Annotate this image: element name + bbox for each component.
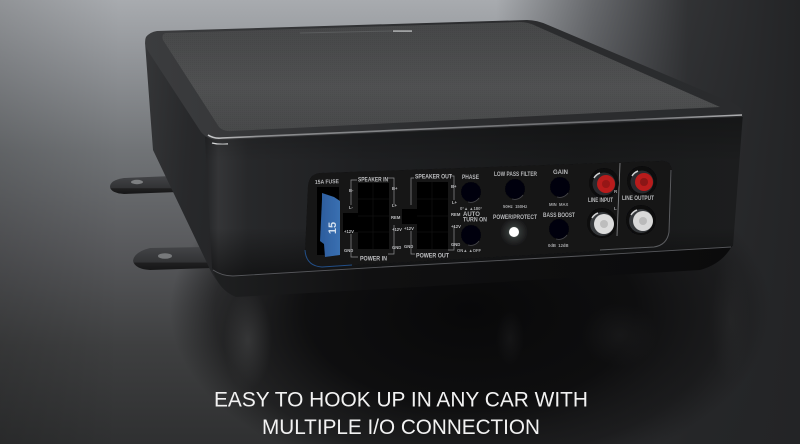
- phase knob: 0°▲ ▲180°: [460, 206, 482, 211]
- RCA panel: [585, 162, 671, 250]
- low pass filter knob: LOW PASS FILTER: [494, 172, 538, 178]
- RCA jack: line input R: [589, 168, 619, 198]
- panel recess: [305, 161, 672, 267]
- connector labels: +12V: [404, 226, 414, 231]
- gain knob: [549, 170, 570, 207]
- RCA jack: line output R: [627, 166, 657, 196]
- left side wall: [145, 42, 240, 297]
- fabric top panel: [162, 22, 720, 131]
- amplifier body: [145, 20, 743, 297]
- connector labels: GND: [451, 242, 460, 247]
- connector labels: GND: [344, 248, 353, 253]
- bass boost knob: BASS BOOST: [543, 213, 575, 219]
- connector labels: POWER OUT: [416, 252, 449, 260]
- caption: EASY TO HOOK UP IN ANY CAR WITH: [214, 388, 588, 412]
- bottom seam: [213, 247, 731, 276]
- bass boost knob: 0dB 12dB: [548, 243, 568, 248]
- RCA panel: R: [614, 189, 618, 194]
- connector labels: REM: [451, 212, 461, 217]
- connector labels: GND: [392, 245, 401, 250]
- low pass filter knob: 50Hz 150Hz: [503, 204, 527, 209]
- control panel: [305, 161, 672, 267]
- RCA panel: L: [614, 206, 617, 211]
- gain knob: GAIN: [553, 170, 568, 176]
- connector labels: B+: [392, 186, 398, 191]
- RCA labels: LINE INPUT: [588, 198, 613, 204]
- connector labels: REM: [391, 215, 401, 220]
- connector labels: L-: [349, 205, 354, 210]
- connector labels: B+: [451, 184, 457, 189]
- connector labels: SPEAKER IN: [358, 176, 388, 184]
- auto turn on knob: ON▲ ▲OFF: [457, 248, 482, 253]
- connector labels: +12V: [344, 229, 354, 234]
- connector labels: +12V: [451, 224, 461, 229]
- power protect LED: [493, 215, 537, 247]
- fuse 15A: [320, 193, 340, 257]
- front face: [205, 113, 743, 277]
- auto turn on knob: TURN ON: [463, 218, 487, 224]
- top rim highlight: [208, 115, 742, 138]
- speaker out connector: [402, 182, 448, 249]
- bass boost knob: [543, 213, 575, 248]
- power protect LED: POWER/PROTECT: [493, 215, 537, 221]
- gain knob: MIN MAX: [549, 202, 569, 207]
- connector brackets: [351, 176, 454, 257]
- low pass filter knob: [494, 172, 538, 209]
- floor reflection: [170, 135, 770, 444]
- bottom strip: [212, 246, 732, 297]
- logo glint on top: [300, 31, 412, 33]
- auto turn on knob: [457, 212, 487, 253]
- fuse 15A: 15: [327, 222, 339, 234]
- mounting tab: upper: [110, 176, 178, 194]
- phase knob: [460, 175, 482, 211]
- fuse label: 15A FUSE: [315, 179, 339, 186]
- connector labels: [344, 174, 461, 262]
- mounting tab: lower: [133, 247, 212, 270]
- RCA jack: line output L: [626, 205, 656, 235]
- caption: [214, 388, 588, 439]
- RCA panel: LINE OUTPUT: [622, 196, 654, 202]
- RCA jack: line input L: [587, 208, 617, 238]
- caption: MULTIPLE I/O CONNECTION: [262, 416, 540, 439]
- connector labels: SPEAKER OUT: [415, 174, 452, 180]
- speaker in connector: [343, 183, 389, 249]
- side rim corner highlight: [212, 143, 228, 144]
- connector labels: POWER IN: [360, 256, 387, 262]
- auto turn on knob: AUTO: [463, 212, 480, 218]
- connector labels: GND: [404, 244, 413, 249]
- fuse slot: [317, 187, 339, 255]
- connector labels: L+: [392, 203, 398, 208]
- connector labels: B-: [349, 188, 354, 193]
- top shell: [145, 20, 743, 140]
- connector labels: +12V: [392, 227, 402, 232]
- connector labels: L+: [452, 200, 458, 205]
- phase knob: PHASE: [462, 175, 479, 181]
